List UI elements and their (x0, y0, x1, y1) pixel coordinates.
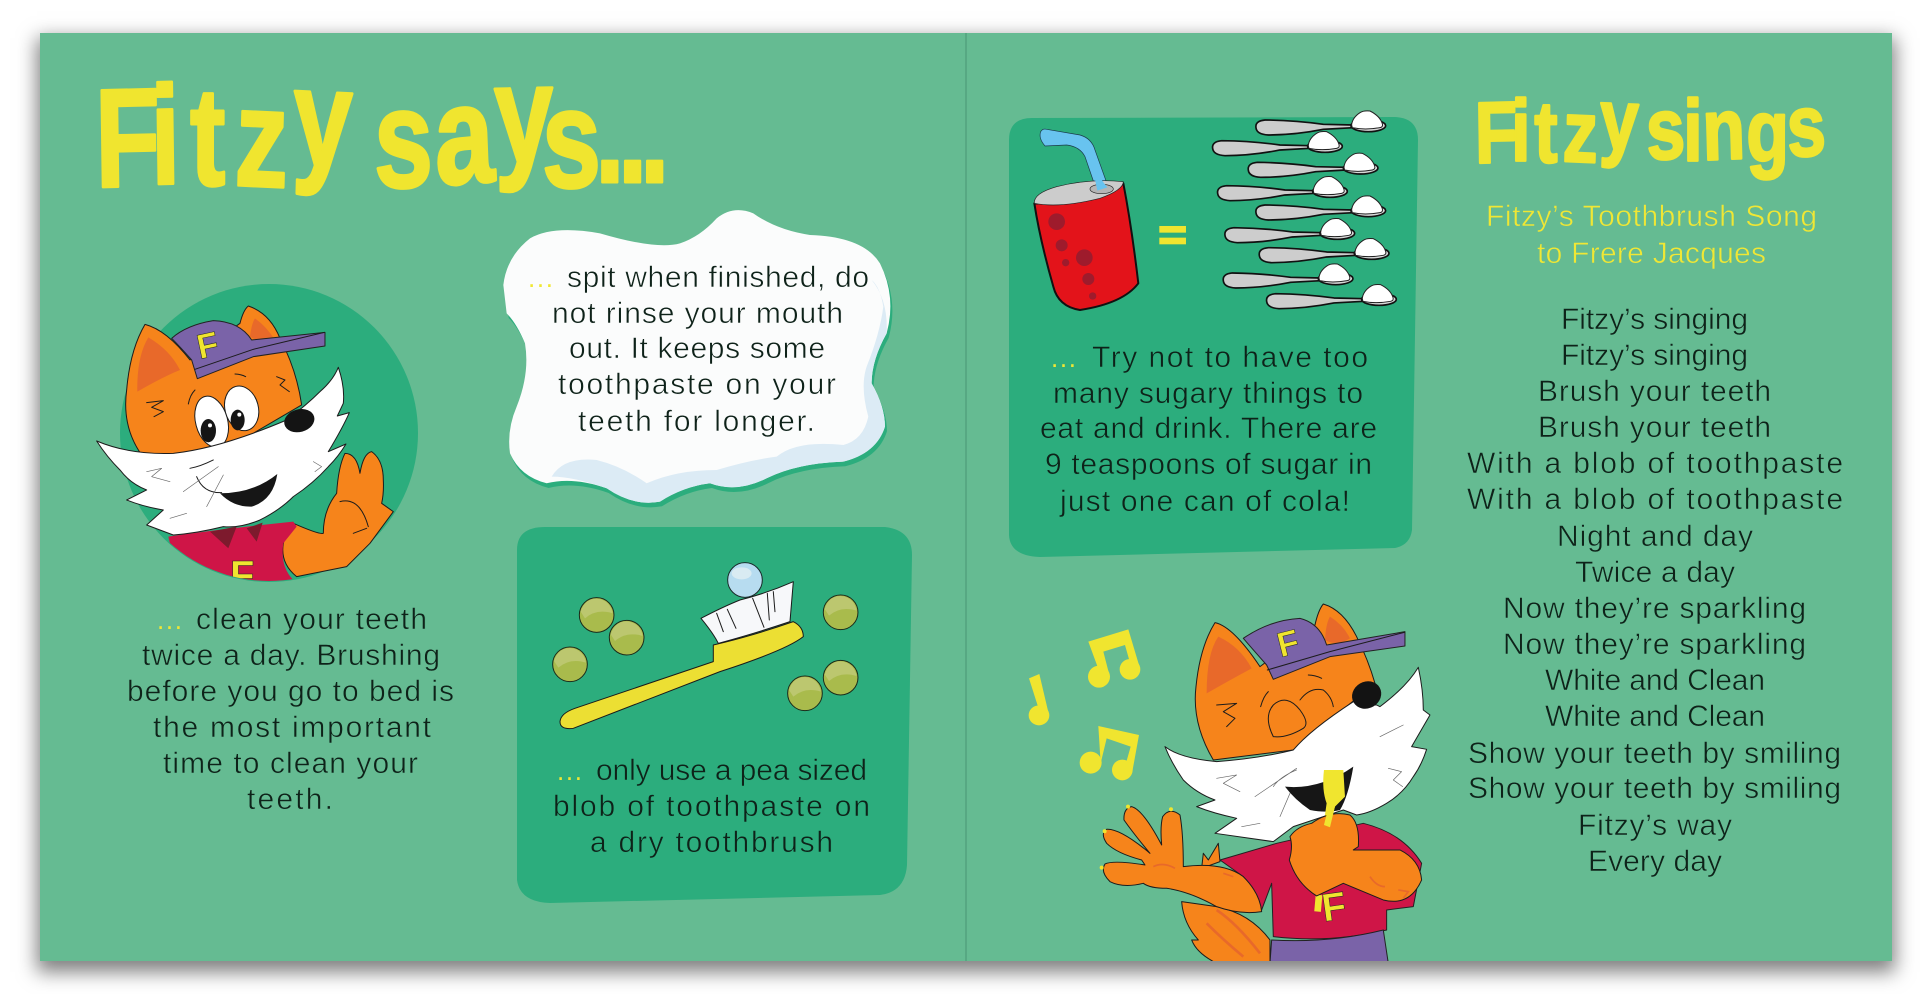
panel: clean your teeth with waving Fitzy (97, 284, 418, 597)
panel: spit bubble (503, 210, 892, 507)
song lyrics (1467, 303, 1843, 878)
cola panel text: ... (1051, 343, 1076, 373)
song lyrics: Twice a day (1575, 556, 1735, 589)
subheading: song name: to Frere Jacques (1537, 237, 1766, 270)
Fitzy singing with toothbrush (1100, 604, 1430, 963)
text: clean your teeth: clean your teeth (196, 603, 427, 636)
pea panel text (553, 754, 870, 859)
bubble text: spit when finished, do (567, 261, 869, 294)
heading: Fitzy sings: Fitzy sings (1474, 71, 1827, 182)
song lyrics: Every day (1588, 845, 1722, 878)
icon: toothbrush and peas (553, 563, 858, 729)
song lyrics: Night and day (1557, 520, 1753, 553)
cola panel text (1040, 341, 1377, 518)
song lyrics: Brush your teeth (1538, 375, 1771, 408)
text: clean your teeth: time to clean your (163, 747, 418, 780)
song lyrics: Show your teeth by smiling (1468, 772, 1841, 805)
Fitzy head portrait: F (230, 553, 254, 597)
title: Fitzy says: Fitzy says... (94, 36, 669, 218)
song lyrics: White and Clean (1545, 664, 1765, 697)
song lyrics: With a blob of toothpaste (1467, 447, 1843, 480)
bubble shape (503, 210, 892, 507)
song lyrics: Now they’re sparkling (1503, 628, 1806, 661)
panel: sugar in cola (1009, 111, 1418, 557)
centre page fold (965, 33, 967, 961)
subheading: song name: Fitzy’s Toothbrush Song (1486, 200, 1817, 233)
text: clean your teeth: teeth. (247, 783, 333, 816)
cola panel text: 9 teaspoons of sugar in (1045, 448, 1372, 481)
text: clean your teeth: twice a day. Brushing (142, 639, 440, 672)
Fitzy singing with toothbrush: F (1319, 884, 1349, 931)
text: clean your teeth: before you go to bed is (127, 675, 454, 708)
song lyrics: Fitzy’s way (1578, 809, 1732, 842)
badge circle (120, 284, 418, 582)
song lyrics: Fitzy’s singing (1561, 303, 1748, 336)
pea panel text: only use a pea sized (596, 754, 867, 787)
song lyrics: With a blob of toothpaste (1467, 483, 1843, 516)
cola panel text: just one can of cola! (1059, 485, 1350, 518)
text: clean your teeth (127, 603, 454, 816)
bubble text: toothpaste on your (558, 368, 836, 401)
icon: cola can equals nine spoons (1034, 111, 1396, 310)
pea panel text: ... (557, 756, 582, 786)
bubble text: ... (528, 263, 553, 293)
bubble text: teeth for longer. (578, 405, 815, 438)
cola panel text: Try not to have too (1092, 341, 1368, 374)
pea panel text: a dry toothbrush (590, 826, 833, 859)
song lyrics: Now they’re sparkling (1503, 592, 1806, 625)
song lyrics: Fitzy’s singing (1561, 339, 1748, 372)
cola panel text: many sugary things to (1053, 377, 1363, 410)
Fitzy head portrait (97, 306, 393, 597)
cola panel text: eat and drink. There are (1040, 412, 1377, 445)
pea panel text: blob of toothpaste on (553, 790, 870, 823)
bubble text (528, 261, 869, 438)
Fitzy singing with toothbrush: F (1273, 623, 1303, 665)
icon: music notes (1029, 629, 1140, 780)
bubble text: out. It keeps some (569, 332, 825, 365)
subheading: song name (1486, 200, 1817, 270)
song lyrics: White and Clean (1545, 700, 1765, 733)
text: clean your teeth: the most important (153, 711, 432, 744)
song lyrics: Show your teeth by smiling (1468, 737, 1841, 770)
panel: pea sized toothpaste (517, 527, 912, 903)
bubble text: not rinse your mouth (552, 297, 843, 330)
text: clean your teeth: ... (157, 605, 182, 635)
Fitzy head portrait: F (194, 325, 222, 367)
song lyrics: Brush your teeth (1538, 411, 1771, 444)
